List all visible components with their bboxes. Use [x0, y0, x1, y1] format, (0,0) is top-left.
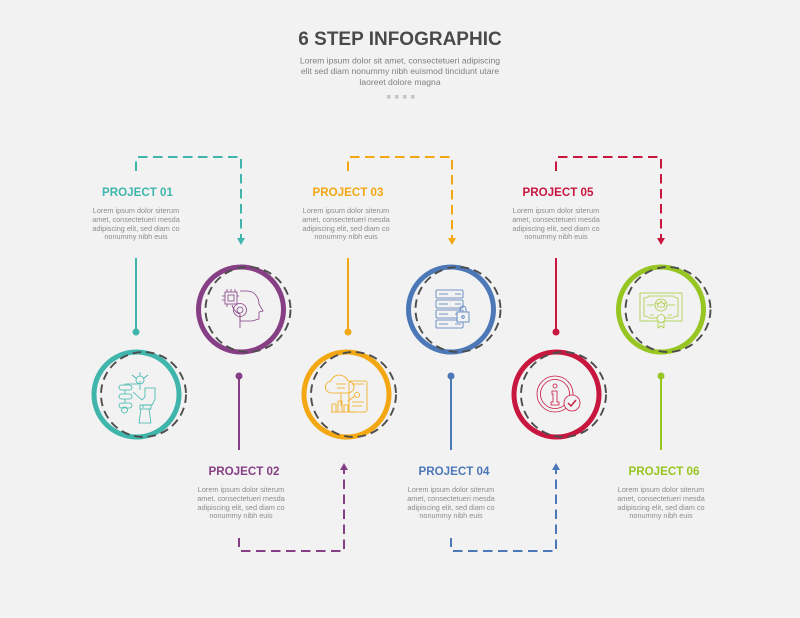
connector arrow 5: [556, 157, 665, 245]
text block 2: amet, consectetueri mesda: [197, 494, 286, 503]
stem 3: [344, 258, 352, 336]
text block 3: [302, 206, 391, 241]
text block 1: adipiscing elit, sed diam co: [92, 224, 180, 233]
title: 6 STEP INFOGRAPHIC: [298, 29, 502, 50]
stem 2: [236, 372, 242, 450]
circle 4: [408, 267, 500, 352]
text block 5: Lorem ipsum dolor siterum: [513, 206, 599, 215]
subtitle text: [300, 56, 500, 87]
step 3: project 03: [302, 157, 456, 437]
icon: server rack with lock: [436, 290, 469, 328]
text block 2: nonummy nibh euis: [209, 511, 273, 520]
icon: robot hand and flowchart: [119, 372, 155, 423]
text block 3: amet, consectetueri mesda: [302, 215, 391, 224]
circle 2: [198, 267, 290, 352]
text block 5: [512, 206, 601, 241]
text block 5: adipiscing elit, sed diam co: [512, 224, 600, 233]
text block 4: amet, consectetueri mesda: [407, 494, 496, 503]
circle 6: [618, 267, 710, 352]
icon: info badge with check: [537, 376, 580, 412]
subtitle text: elit sed diam nonummy nibh euismod tincidunt utare: [301, 66, 499, 76]
text block 5: nonummy nibh euis: [524, 232, 588, 241]
circle 3: [304, 352, 396, 437]
heading project 03: PROJECT 03: [313, 186, 384, 199]
text block 5: amet, consectetueri mesda: [512, 215, 601, 224]
heading project 04: PROJECT 04: [419, 465, 490, 478]
icon: certificate: [640, 293, 682, 328]
connector arrow 2: [239, 463, 348, 551]
step 2: project 02: [197, 267, 348, 551]
text block 6: adipiscing elit, sed diam co: [617, 503, 705, 512]
stem 5: [552, 258, 560, 336]
pagination dots: [387, 95, 414, 98]
text block 1: Lorem ipsum dolor siterum: [93, 206, 179, 215]
subtitle text: laoreet dolore magna: [359, 77, 441, 87]
heading project 02: PROJECT 02: [209, 465, 279, 478]
step 1: project 01: [92, 157, 245, 437]
text block 1: [92, 206, 181, 241]
heading project 05: PROJECT 05: [523, 186, 594, 199]
text block 4: nonummy nibh euis: [419, 511, 483, 520]
circle 5: [514, 352, 606, 437]
text block 2: adipiscing elit, sed diam co: [197, 503, 285, 512]
step 5: project 05: [512, 157, 665, 437]
step 4: project 04: [407, 267, 560, 551]
text block 4: adipiscing elit, sed diam co: [407, 503, 495, 512]
icon: cloud and mobile chart: [325, 375, 367, 412]
connector arrow 4: [451, 463, 560, 551]
text block 4: Lorem ipsum dolor siterum: [408, 485, 494, 494]
text block 3: nonummy nibh euis: [314, 232, 378, 241]
text block 1: amet, consectetueri mesda: [92, 215, 181, 224]
connector arrow 1: [136, 157, 245, 245]
connector arrow 3: [348, 157, 456, 245]
text block 3: adipiscing elit, sed diam co: [302, 224, 390, 233]
icon: AI head with chip: [222, 289, 263, 328]
text block 6: Lorem ipsum dolor siterum: [618, 485, 704, 494]
text block 6: amet, consectetueri mesda: [617, 494, 706, 503]
heading project 01: PROJECT 01: [102, 186, 173, 199]
text block 1: nonummy nibh euis: [104, 232, 168, 241]
heading project 06: PROJECT 06: [629, 465, 700, 478]
stem 4: [448, 372, 454, 450]
text block 4: [407, 485, 496, 520]
stem 6: [658, 372, 664, 450]
text block 6: [617, 485, 706, 520]
circle 1: [94, 352, 186, 437]
text block 2: [197, 485, 286, 520]
subtitle text: Lorem ipsum dolor sit amet, consectetueri adipiscing: [300, 56, 500, 66]
text block 3: Lorem ipsum dolor siterum: [303, 206, 389, 215]
stem 1: [132, 258, 140, 336]
step 6: project 06: [617, 267, 710, 520]
text block 2: Lorem ipsum dolor siterum: [198, 485, 284, 494]
text block 6: nonummy nibh euis: [629, 511, 693, 520]
